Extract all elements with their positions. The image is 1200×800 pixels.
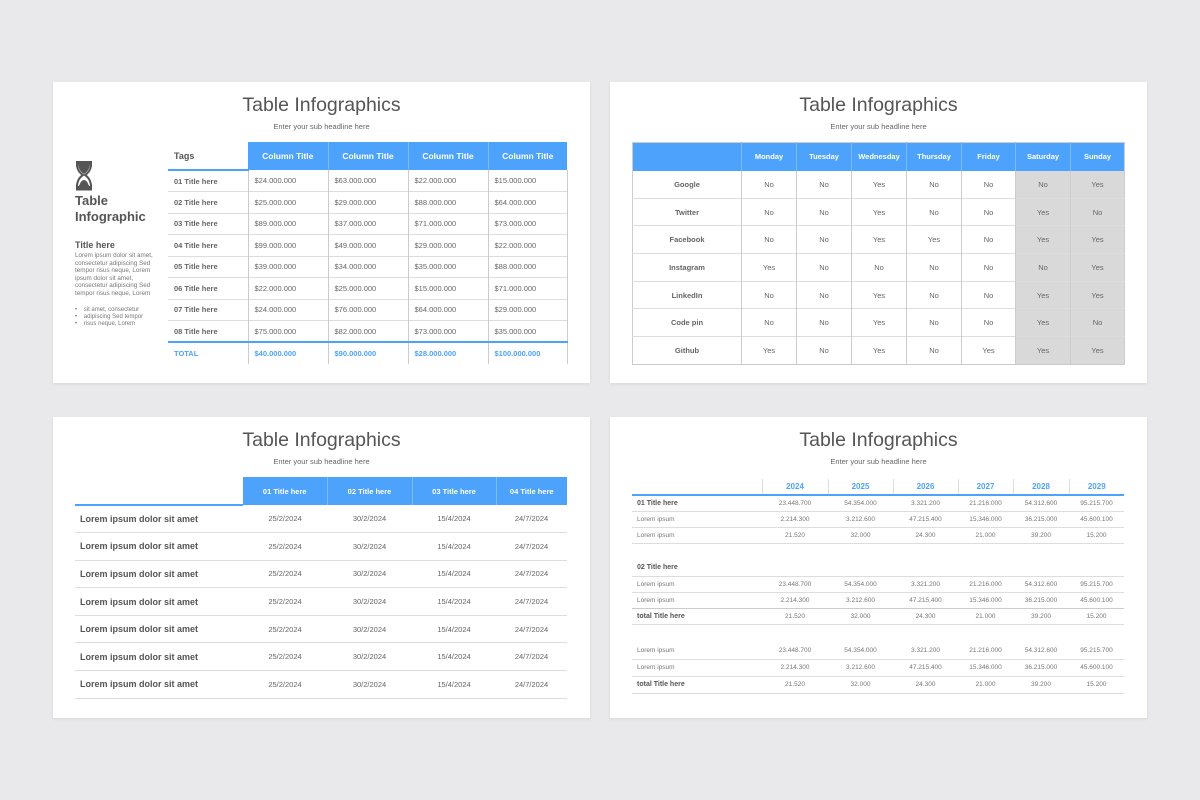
data table: $22.000.000 [414, 176, 456, 185]
yearly table: 2024 [786, 482, 804, 491]
data table: $34.000.000 [334, 262, 376, 271]
schedule table: Code pin [671, 318, 703, 327]
dates table: 25/2/2024 [268, 542, 302, 551]
yearly table: 47.215.400 [909, 664, 942, 671]
panel: dates table [53, 417, 590, 718]
schedule table: Yes [1037, 208, 1049, 217]
yearly table: 15.346.000 [969, 664, 1002, 671]
dates table: 30/2/2024 [353, 680, 386, 689]
yearly table: 39.200 [1031, 681, 1051, 688]
data table: $88.000.000 [494, 262, 536, 271]
sidebar heading: Table [75, 193, 108, 208]
schedule table: No [819, 235, 829, 244]
schedule table: Yes [1037, 318, 1049, 327]
data table: $15.000.000 [494, 176, 536, 185]
schedule table: Yes [763, 263, 775, 272]
dates table: 30/2/2024 [353, 597, 386, 606]
schedule table: Yes [1091, 291, 1104, 300]
schedule table: Yes [763, 346, 775, 355]
schedule table: Yes [873, 346, 885, 355]
dates table: 30/2/2024 [353, 569, 386, 578]
yearly table: 47.215.400 [909, 516, 942, 522]
yearly table: 15.200 [1087, 612, 1106, 620]
dates table: 15/4/2024 [437, 569, 471, 578]
dates table: 30/2/2024 [353, 625, 386, 634]
dates table [75, 477, 567, 699]
dates table: Lorem ipsum dolor sit amet [80, 569, 198, 579]
panel: weekly schedule table [610, 82, 1147, 383]
yearly table: 3.212.600 [846, 664, 875, 671]
yearly table: 2028 [1032, 482, 1050, 491]
yearly table: 54.354.000 [844, 580, 877, 588]
panel: yearly figures table [610, 417, 1147, 718]
data table: $73.000.000 [414, 326, 456, 336]
schedule table: Twitter [675, 208, 699, 217]
sidebar text block: • risus neque, Lorem [75, 321, 135, 327]
yearly table [632, 479, 1124, 694]
yearly table: 24.300 [916, 532, 935, 538]
schedule table: No [984, 180, 993, 189]
data table: $89.000.000 [254, 219, 296, 228]
data table: Column Title [502, 151, 553, 161]
yearly table: 21.216.000 [969, 647, 1002, 654]
schedule table: No [1038, 180, 1048, 189]
data table: 05 Title here [174, 262, 218, 271]
schedule table: No [929, 318, 939, 327]
dates table: Lorem ipsum dolor sit amet [80, 541, 198, 551]
data table: $29.000.000 [494, 305, 536, 314]
schedule table: No [874, 263, 884, 272]
schedule table: Friday [977, 152, 1000, 161]
subtitle: Enter your sub headline here [273, 122, 370, 131]
yearly table: 15.346.000 [969, 596, 1002, 604]
yearly table: 24.300 [916, 612, 935, 620]
dates table: 15/4/2024 [437, 542, 471, 551]
yearly table: 21.000 [976, 681, 995, 688]
schedule table: No [929, 263, 939, 272]
data table: TOTAL [174, 349, 198, 358]
data table: $82.000.000 [334, 326, 376, 336]
data table: $64.000.000 [414, 305, 456, 314]
yearly table: 3.212.600 [846, 596, 875, 604]
dates table: 24/7/2024 [515, 597, 548, 606]
yearly table: 2026 [917, 482, 934, 491]
sidebar text block: • adipiscing Sed tempor [75, 314, 143, 320]
schedule table: No [764, 208, 774, 217]
schedule table: Yes [928, 235, 940, 244]
schedule table: No [984, 208, 993, 217]
schedule table: Yes [1091, 263, 1104, 272]
schedule table: No [984, 318, 993, 327]
yearly table: 3.321.200 [911, 500, 940, 507]
data table: $37.000.000 [334, 219, 376, 228]
data table: $29.000.000 [414, 241, 456, 250]
dates table: Lorem ipsum dolor sit amet [80, 597, 198, 607]
yearly table: Lorem ipsum [637, 596, 675, 604]
schedule table: Wednesday [858, 152, 900, 161]
data table: $22.000.000 [254, 284, 296, 293]
yearly table: 47.215.400 [909, 596, 942, 604]
sidebar text block: Title here [75, 240, 115, 250]
schedule table: No [929, 346, 939, 355]
yearly table: 95.215.700 [1080, 500, 1113, 507]
yearly table: 54.312.600 [1025, 500, 1057, 507]
data table: $75.000.000 [254, 326, 296, 336]
yearly table: Lorem ipsum [637, 580, 675, 588]
yearly table: total Title here [637, 681, 685, 688]
schedule table: No [819, 318, 829, 327]
schedule table: Yes [873, 235, 885, 244]
dates table: 15/4/2024 [437, 652, 471, 661]
yearly table: 01 Title here [637, 500, 678, 507]
subtitle: Enter your sub headline here [273, 457, 370, 466]
yearly table: 39.200 [1031, 532, 1051, 538]
schedule table: No [1093, 318, 1102, 327]
schedule table: No [819, 346, 829, 355]
yearly table: 45.600.100 [1080, 664, 1113, 671]
data table: $24.000.000 [254, 176, 296, 185]
schedule table: No [984, 235, 993, 244]
yearly table: 2.214.300 [781, 664, 809, 671]
yearly table: 24.300 [916, 681, 935, 688]
schedule table: Yes [982, 346, 995, 355]
schedule table: No [819, 208, 829, 217]
yearly table: 2.214.300 [781, 516, 809, 522]
schedule table: Yes [873, 291, 885, 300]
yearly table: 2027 [977, 482, 994, 491]
data table: $29.000.000 [334, 198, 376, 207]
schedule table: No [1093, 208, 1102, 217]
panel: budget table [53, 82, 590, 383]
dates table: 24/7/2024 [515, 542, 548, 551]
yearly table: 54.312.600 [1025, 580, 1057, 588]
schedule table: No [764, 318, 774, 327]
data table: $28.000.000 [414, 349, 456, 358]
schedule table: No [984, 263, 993, 272]
yearly table: 2025 [852, 482, 869, 491]
data table: 01 Title here [174, 176, 218, 186]
dates table: 02 Title here [348, 486, 391, 496]
schedule table: Yes [1091, 235, 1104, 244]
schedule table: Yes [873, 180, 885, 189]
data table: $76.000.000 [334, 305, 376, 314]
yearly table: 45.600.100 [1080, 516, 1113, 522]
schedule table: No [819, 263, 829, 272]
data table: $15.000.000 [414, 284, 456, 293]
yearly table: 36.215.000 [1025, 596, 1057, 604]
schedule table: Yes [1037, 235, 1049, 244]
yearly table: Lorem ipsum [637, 647, 675, 654]
dates table: 24/7/2024 [515, 680, 548, 689]
schedule table: No [819, 180, 829, 189]
dates table: 15/4/2024 [437, 625, 471, 634]
yearly table: 54.354.000 [844, 647, 877, 654]
yearly table: 21.520 [785, 532, 805, 538]
schedule table: Thursday [917, 152, 951, 161]
yearly table: 21.000 [976, 532, 995, 538]
schedule table: No [984, 291, 993, 300]
sidebar text block: Lorem ipsum dolor sit amet, consectetur adipiscing Sed tempor risus neque, Lorem ipsum dolor sit amet, consectetur adipiscing Sed tempor risus neque, Lorem [75, 252, 153, 297]
data table: $40.000.000 [254, 349, 296, 358]
dates table: 25/2/2024 [268, 514, 302, 523]
sidebar text block [75, 240, 153, 327]
yearly table: 23.448.700 [779, 580, 811, 588]
schedule table: Yes [873, 208, 885, 217]
schedule table [632, 142, 1125, 365]
dates table: 24/7/2024 [515, 514, 548, 523]
schedule table: No [929, 291, 939, 300]
dates table: 25/2/2024 [268, 680, 302, 689]
schedule table: No [764, 235, 774, 244]
yearly table: 2.214.300 [781, 596, 809, 604]
dates table: 24/7/2024 [515, 652, 548, 661]
dates table: 15/4/2024 [437, 597, 471, 606]
yearly table: 23.448.700 [779, 500, 811, 507]
yearly table: 54.312.600 [1025, 647, 1057, 654]
dates table: 30/2/2024 [353, 652, 386, 661]
yearly table: 45.600.100 [1080, 596, 1113, 604]
data table: 06 Title here [174, 284, 218, 293]
dates table: 30/2/2024 [353, 514, 386, 523]
data table: $71.000.000 [494, 284, 536, 293]
schedule table: No [819, 291, 829, 300]
title: Table Infographics [242, 429, 401, 451]
data table: $99.000.000 [254, 241, 296, 250]
data table: Column Title [422, 151, 474, 161]
yearly table: 3.321.200 [911, 647, 940, 654]
sidebar heading: Infographic [75, 209, 146, 224]
schedule table: No [929, 180, 939, 189]
sidebar text block: • sit amet, consectetur [75, 307, 139, 313]
yearly table: 21.000 [976, 612, 995, 620]
yearly table: 21.520 [785, 681, 805, 688]
yearly table: 36.215.000 [1025, 664, 1057, 671]
data table: $22.000.000 [494, 241, 536, 250]
data table: $64.000.000 [494, 198, 536, 207]
yearly table: total Title here [637, 612, 685, 620]
schedule table: Tuesday [809, 152, 839, 161]
data table: 03 Title here [174, 219, 218, 228]
yearly table: 15.346.000 [969, 516, 1002, 522]
dates table: 25/2/2024 [268, 652, 302, 661]
data table: $100.000.000 [494, 349, 540, 358]
yearly table: 02 Title here [637, 564, 678, 571]
yearly table: 21.216.000 [969, 580, 1002, 588]
schedule table: Yes [1091, 180, 1104, 189]
schedule table: Instagram [669, 263, 705, 272]
schedule table: No [929, 208, 939, 217]
yearly table: 2029 [1088, 482, 1106, 491]
yearly table: 15.200 [1087, 532, 1106, 538]
yearly table: 21.216.000 [969, 500, 1002, 507]
schedule table: LinkedIn [672, 291, 702, 300]
data table: $35.000.000 [494, 326, 536, 336]
schedule table: Saturday [1027, 152, 1059, 161]
yearly table: 95.215.700 [1080, 580, 1113, 588]
data table: $25.000.000 [254, 198, 296, 207]
dates table: 25/2/2024 [268, 625, 302, 634]
dates table: Lorem ipsum dolor sit amet [80, 652, 198, 662]
icon: hourglass [76, 161, 92, 190]
data table [168, 142, 568, 364]
data table: $49.000.000 [334, 241, 376, 250]
yearly table: Lorem ipsum [637, 516, 675, 522]
schedule table: Yes [873, 318, 885, 327]
yearly table: 39.200 [1031, 612, 1051, 620]
schedule table: Yes [1091, 346, 1104, 355]
data table: $71.000.000 [414, 219, 456, 228]
yearly table: 32.000 [851, 532, 870, 538]
schedule table: Sunday [1084, 152, 1111, 161]
schedule table: Facebook [669, 235, 704, 244]
schedule table: No [1038, 263, 1048, 272]
schedule table: Google [674, 180, 700, 189]
dates table: Lorem ipsum dolor sit amet [80, 679, 198, 689]
data table: $90.000.000 [334, 349, 376, 358]
schedule table: No [764, 291, 774, 300]
data table: 02 Title here [174, 198, 218, 207]
yearly table: 95.215.700 [1080, 647, 1113, 654]
data table: $39.000.000 [254, 262, 296, 271]
data table: 04 Title here [174, 241, 218, 250]
yearly table: 54.354.000 [844, 500, 877, 507]
schedule table: Github [675, 346, 699, 355]
dates table: 01 Title here [263, 486, 307, 496]
sidebar heading [75, 193, 146, 224]
dates table: 24/7/2024 [515, 625, 548, 634]
schedule table: No [764, 180, 774, 189]
yearly table: 32.000 [851, 612, 870, 620]
data table: $35.000.000 [414, 262, 456, 271]
data table: $24.000.000 [254, 305, 296, 314]
data table: $73.000.000 [494, 219, 536, 228]
yearly table: 3.212.600 [846, 516, 875, 522]
schedule table: Yes [1037, 291, 1049, 300]
title: Table Infographics [799, 429, 958, 451]
subtitle: Enter your sub headline here [830, 457, 927, 466]
data table: Column Title [342, 151, 394, 161]
schedule table: Yes [1037, 346, 1049, 355]
dates table: 03 Title here [432, 486, 476, 496]
title: Table Infographics [799, 94, 958, 116]
dates table: Lorem ipsum dolor sit amet [80, 624, 198, 634]
title: Table Infographics [242, 94, 401, 116]
data table: $63.000.000 [334, 176, 376, 185]
data table: 08 Title here [174, 326, 218, 336]
data table: 07 Title here [174, 305, 218, 314]
dates table: 25/2/2024 [268, 569, 302, 578]
yearly table: Lorem ipsum [637, 532, 675, 538]
dates table: 30/2/2024 [353, 542, 386, 551]
yearly table: 32.000 [851, 681, 870, 688]
dates table: 04 Title here [510, 486, 554, 496]
data table: Tags [174, 150, 194, 160]
dates table: 24/7/2024 [515, 569, 548, 578]
yearly table: 3.321.200 [911, 580, 940, 588]
dates table: 25/2/2024 [268, 597, 302, 606]
yearly table: Lorem ipsum [637, 664, 675, 671]
schedule table: Monday [755, 152, 783, 161]
data table: $25.000.000 [334, 284, 376, 293]
dates table: Lorem ipsum dolor sit amet [80, 514, 198, 524]
yearly table: 23.448.700 [779, 647, 811, 654]
data table: Column Title [262, 151, 313, 161]
yearly table: 36.215.000 [1025, 516, 1057, 522]
yearly table: 21.520 [785, 612, 805, 620]
yearly table: 15.200 [1087, 681, 1106, 688]
subtitle: Enter your sub headline here [830, 122, 927, 131]
data table: $88.000.000 [414, 198, 456, 207]
dates table: 15/4/2024 [437, 514, 471, 523]
dates table: 15/4/2024 [437, 680, 471, 689]
